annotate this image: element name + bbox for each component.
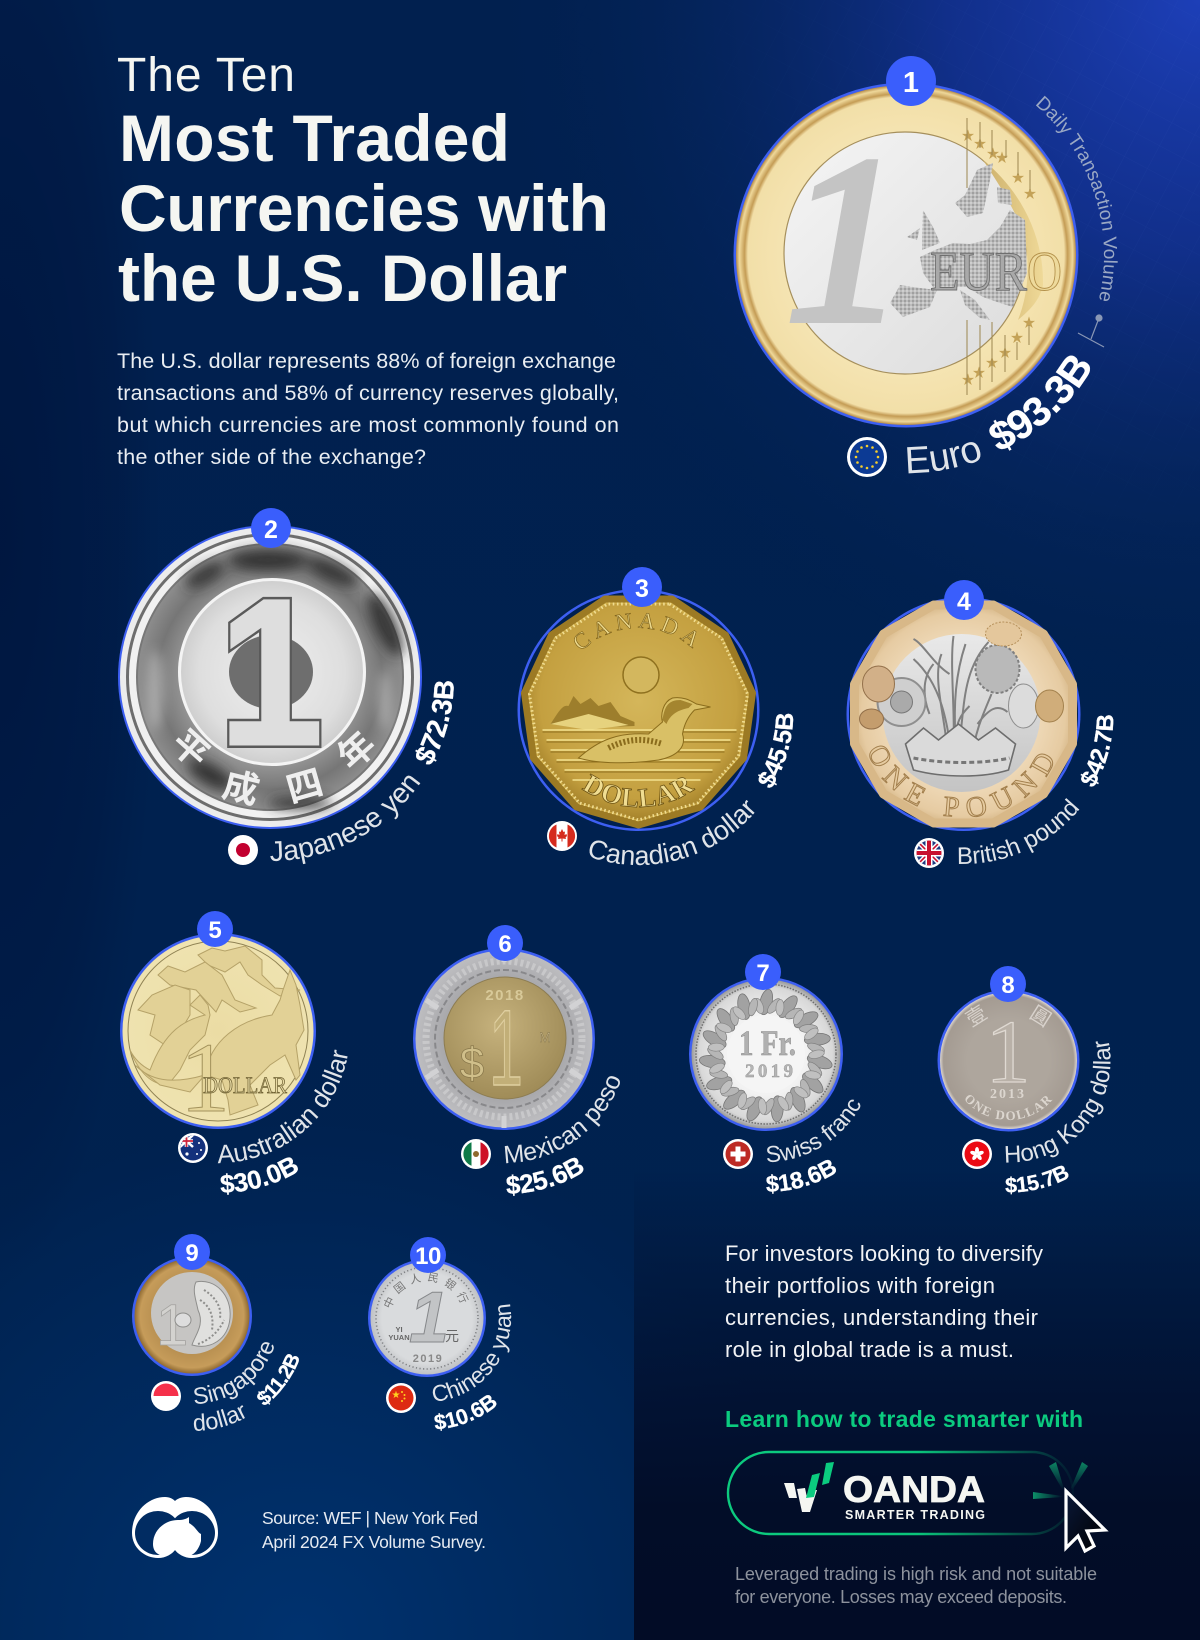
label: singapore dollar: Singapore (194, 1342, 274, 1404)
yen coin: era inscription: 年 (330, 723, 384, 778)
pound: floral emblem (914, 636, 1008, 754)
flag: China (386, 1383, 416, 1413)
OANDA wordmark: OANDA (843, 1469, 985, 1510)
peso: bronze centre (444, 977, 566, 1099)
coin: chinese yuan: 中国人民银行 (384, 1272, 469, 1308)
value: hong kong dollar: $15.7B (1005, 1166, 1068, 1194)
pound: lettering: ONE POUND (869, 746, 1054, 818)
aussie: lettering: DOLLAR (203, 1073, 288, 1098)
title (117, 49, 609, 315)
euro coin: gold crescent (983, 160, 1043, 320)
euro coin: stars: ★ (995, 150, 1009, 165)
label: hong kong dollar: Hong Kong dollar (1006, 1041, 1111, 1163)
intro text block: the other side of the exchange? (117, 445, 426, 469)
label: singapore dollar: dollar (194, 1405, 245, 1431)
flag: Japan (228, 835, 258, 865)
rank badge 5 (197, 911, 233, 947)
value: singapore dollar: $11.2B (257, 1354, 299, 1405)
coin: mexican peso: 1 (489, 987, 523, 1108)
euro coin: stars: ★ (998, 345, 1012, 360)
euro coin: stars: ★ (961, 128, 975, 143)
hk coin: characters (962, 1001, 1054, 1032)
coin: mexican peso (413, 948, 595, 1130)
rank badge 1 (886, 56, 936, 106)
euro coin: stars: ★ (1022, 315, 1036, 330)
closing text block (725, 1241, 1043, 1362)
coin: mexican peso: M (539, 1029, 551, 1045)
rank badge 1: 1 (903, 67, 919, 99)
rank badge 2 (251, 508, 291, 548)
value: british pound: $42.7B (1080, 715, 1114, 787)
coin: british pound (846, 598, 1080, 831)
icon: publisher logo (132, 1497, 218, 1558)
disclaimer: for everyone. Losses may exceed deposits. (735, 1587, 1067, 1607)
euro coin: stars: ★ (1011, 170, 1025, 185)
flag: Australia (178, 1133, 208, 1163)
euro coin: stars (961, 128, 1037, 387)
yen coin: era inscription: 四 (282, 761, 328, 811)
coin: chinese yuan: YUAN (388, 1333, 410, 1342)
coin: hong kong dollar (938, 991, 1080, 1132)
hk coin: characters: 圓 (1026, 1002, 1054, 1032)
value: australian dollar: $30.0B (220, 1157, 298, 1195)
rank badge 2: 2 (264, 516, 278, 544)
coin: swiss franc: 2019 (745, 1061, 793, 1082)
rank badge 10 (410, 1237, 446, 1273)
euro coin: stars: ★ (1010, 330, 1024, 345)
flag: Singapore (151, 1381, 181, 1411)
rank badge 6: 6 (498, 931, 512, 958)
label: british pound: British pound (958, 798, 1080, 864)
title: Most Traded (119, 101, 510, 175)
euro coin: lettering: EURO (930, 241, 1062, 303)
euro coin: stars: ★ (973, 136, 987, 151)
coin: hong kong dollar: ONE DOLLAR (966, 1095, 1052, 1120)
loonie: bird (578, 698, 710, 763)
coin: singapore dollar (132, 1256, 252, 1376)
loonie: lettering: CANADA (574, 612, 696, 649)
source note: April 2024 FX Volume Survey. (262, 1532, 486, 1552)
rank badge 7: 7 (756, 960, 770, 987)
label: chinese yuan: Chinese yuan (432, 1304, 512, 1401)
label: canadian dollar: Canadian dollar (590, 800, 754, 866)
panel: dark call to action backdrop (634, 1170, 1200, 1640)
yen coin: numeral: 1 (219, 556, 323, 788)
value: swiss franc: $18.6B (766, 1160, 836, 1194)
euro coin: stars: ★ (961, 372, 975, 387)
yuan: inscriptions: YI (395, 1325, 403, 1334)
coin: australian dollar (120, 933, 316, 1133)
euro coin: stars: ★ (986, 146, 1000, 161)
flag: EU (847, 437, 887, 477)
rank badge 8 (990, 966, 1026, 1002)
yuan: numeral: 1 (409, 1278, 449, 1358)
flag: Canada (547, 821, 577, 851)
flag: Switzerland (723, 1139, 753, 1169)
loonie: sun (623, 657, 659, 693)
flag: Hong Kong (962, 1139, 992, 1169)
euro coin: stars: ★ (1023, 186, 1037, 201)
source note (262, 1508, 486, 1552)
icon: OANDA logo mark (784, 1462, 834, 1512)
intro text block (117, 349, 619, 469)
coin: swiss franc (689, 977, 843, 1131)
icon: click sparks (1033, 1462, 1088, 1499)
label: swiss franc: Swiss franc (767, 1100, 860, 1162)
disclaimer: Leveraged trading is high risk and not suitable (735, 1564, 1097, 1584)
flag: Mexico (461, 1139, 491, 1169)
coin: chinese yuan (368, 1261, 486, 1377)
coin: chinese yuan: 元 (445, 1328, 459, 1344)
yen coin: era inscription (163, 721, 384, 812)
closing text block: role in global trade is a must. (725, 1337, 1014, 1362)
loonie: island (550, 696, 634, 728)
label: euro: Euro (907, 442, 980, 474)
value: mexican peso: $25.6B (506, 1158, 584, 1196)
coin: canadian dollar (518, 590, 760, 831)
OANDA tagline: SMARTER TRADING (845, 1508, 985, 1522)
rank badge 9 (174, 1234, 210, 1270)
closing text block: their portfolios with foreign (725, 1273, 995, 1298)
coin: japanese yen (118, 525, 422, 829)
euro coin: map of Europe (890, 163, 1027, 320)
rank badge 10: 10 (415, 1243, 441, 1270)
coin: mexican peso: $ (460, 1039, 484, 1088)
coin: euro (734, 82, 1078, 428)
rank badge 9: 9 (185, 1240, 199, 1267)
closing text block: For investors looking to diversify (725, 1241, 1043, 1266)
intro text block: The U.S. dollar represents 88% of foreign exchange (117, 349, 616, 373)
singapore: merlion (192, 1281, 230, 1346)
value: chinese yuan: $10.6B (434, 1395, 496, 1431)
rank badge 4 (944, 580, 984, 620)
rank badge 4: 4 (957, 588, 971, 616)
rank badge 3 (622, 567, 662, 607)
rank badge 8: 8 (1001, 972, 1015, 999)
yen coin: era inscription: 平 (163, 721, 217, 776)
disclaimer (735, 1564, 1097, 1607)
euro coin: stars: ★ (972, 365, 986, 380)
source note: Source: WEF | New York Fed (262, 1508, 478, 1528)
euro coin: numeral: 1 (786, 110, 904, 371)
yen coin: era inscription: 成 (219, 764, 263, 812)
hk coin: lettering: 2013 (990, 1087, 1026, 1102)
intro text block: but which currencies are most commonly found on (117, 413, 619, 437)
title: Currencies with (119, 171, 609, 245)
label: daily transaction volume axis: Daily Transaction Volume (1036, 96, 1118, 301)
rank badge 6 (487, 925, 523, 961)
rank badge 7 (745, 954, 781, 990)
loonie: water (542, 730, 736, 780)
euro coin: stars: ★ (985, 355, 999, 370)
flag: China: ★ (392, 1390, 401, 1401)
coin: chinese yuan: 2019 (413, 1353, 443, 1365)
value: canadian dollar: $45.5B (758, 714, 794, 788)
icon: cursor arrow (1066, 1491, 1105, 1551)
title: The Ten (117, 49, 295, 102)
coin: canadian dollar: DOLLAR (581, 774, 696, 808)
rank badge 3: 3 (635, 575, 649, 603)
label: mexican peso: Mexican peso (504, 1076, 620, 1164)
flag: UK (914, 838, 944, 868)
closing text block: currencies, understanding their (725, 1305, 1038, 1330)
swiss: lettering: 1 Fr. (739, 1023, 796, 1063)
label: australian dollar: Australian dollar (218, 1050, 348, 1164)
OANDA button (728, 1452, 1073, 1534)
call to action heading: Learn how to trade smarter with (725, 1406, 1083, 1432)
value: euro: $93.3B (989, 356, 1090, 451)
hk coin: numeral: 1 (986, 1003, 1030, 1102)
label: japanese yen: Japanese yen (270, 776, 420, 864)
pound: silver centre (882, 634, 1040, 792)
pound: crown (906, 724, 1016, 776)
swiss: wreath (697, 987, 836, 1126)
value: japanese yen: $72.3B (415, 681, 454, 764)
label: singapore dollar (194, 1342, 274, 1431)
coin: mexican peso: 2018 (485, 987, 525, 1004)
hk coin: characters: 壹 (962, 1001, 991, 1032)
title: the U.S. Dollar (118, 241, 567, 315)
aussie: kangaroos (130, 946, 304, 1115)
rank badge 5: 5 (208, 917, 222, 944)
singapore: numeral: 1 (156, 1293, 188, 1358)
intro text block: transactions and 58% of currency reserves globally, (117, 381, 619, 405)
yen coin: numeral: 1 (219, 556, 323, 788)
aussie: numeral: 1 (180, 1022, 230, 1133)
